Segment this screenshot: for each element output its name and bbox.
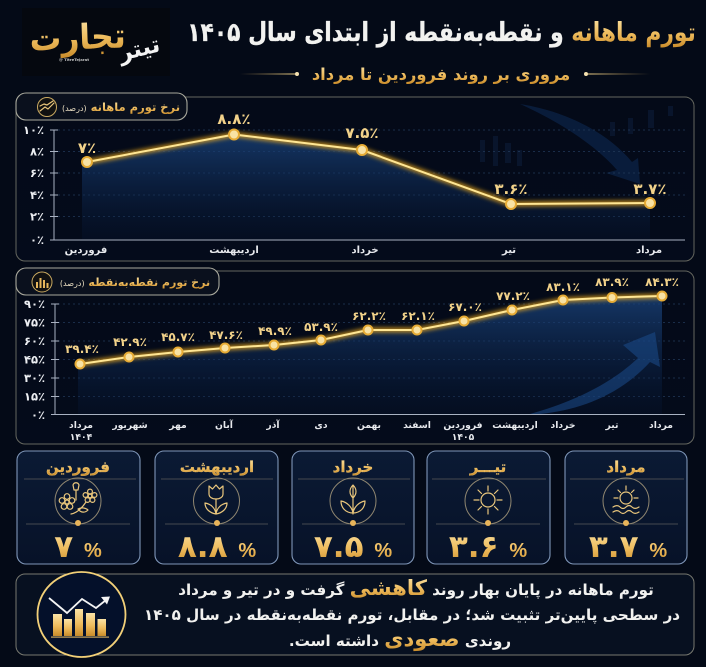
data labels: ۷٪ [78,139,96,157]
y axis: ۶۰٪ [24,334,45,348]
subtitle [240,65,650,84]
y axis [24,297,685,422]
label: point-to-point rate [16,268,219,295]
card: Farvardin [17,451,140,565]
card: Ordibehesht [155,451,278,565]
line series [82,130,655,209]
x labels: اردیبهشت [492,420,538,431]
icon: rising chart badge [38,572,126,657]
label: point-to-point rate: نرخ تورم نقطه‌به‌نقطه (درصد) [60,276,210,289]
x labels: تیر [605,420,618,431]
x labels: مرداد [649,420,673,431]
x labels: ۱۴۰۴ [70,432,93,443]
x labels: ۱۴۰۵ [452,432,475,443]
card: Tir [427,451,550,565]
x labels: اردیبهشت [209,245,259,256]
x labels: فروردین [443,420,483,431]
x labels: اسفند [403,420,431,431]
data labels: ۷.۵٪ [345,124,379,142]
data labels [65,275,679,356]
y axis: ۶٪ [30,166,44,180]
background arrow up [530,332,660,414]
x labels: خرداد [351,245,379,256]
card: Tir: تیـــر [469,458,506,476]
card: Mordad: ۳.۷ % [589,529,667,565]
x labels: تیر [501,245,516,256]
logo: @ TitreTejarat [59,57,89,62]
label: monthly rate [16,93,187,120]
y axis: ۴۵٪ [24,352,45,366]
x labels: مهر [168,420,187,431]
card: Mordad: مرداد [606,458,646,476]
y axis [23,123,685,247]
card: Farvardin: فروردین [46,458,110,476]
data labels: ۸۴.۳٪ [645,275,679,289]
card: Tir: ۳.۶ % [449,529,527,565]
callout text [144,576,680,651]
x labels: فروردین [65,245,107,256]
card: Farvardin: ۷ % [54,529,102,565]
data labels: ۳۹.۴٪ [65,342,99,356]
line series [76,292,666,368]
data labels: ۸۳.۹٪ [595,275,629,289]
callout panel [16,574,694,655]
panel: point-to-point inflation chart [16,271,694,444]
y axis: ۱۰٪ [23,123,44,137]
y axis: ۰٪ [30,233,44,247]
icon: flowers [59,483,97,514]
data labels: ۴۵.۷٪ [161,330,195,344]
y axis: ۱۵٪ [24,390,45,404]
card: Mordad [565,451,687,565]
card: Khordad [292,451,414,565]
y axis: ۳۰٪ [24,371,45,385]
x labels: آبان [215,419,234,431]
logo: تیتر [115,32,163,67]
x labels [69,419,673,443]
icon: sun [474,486,502,514]
card: Ordibehesht: اردیبهشت [180,458,254,476]
data labels: ۷۷.۲٪ [496,289,530,303]
data labels: ۶۲.۱٪ [401,309,435,323]
x labels: آذر [265,419,280,431]
background arrow down [520,104,640,184]
x labels: دی [314,420,328,431]
callout text: تورم ماهانه در پایان بهار روند کاهشی گرفت و در تیر و مرداد [178,576,654,600]
data labels: ۵۳.۹٪ [304,320,338,334]
data labels: ۸۳.۱٪ [546,280,580,294]
x labels: خرداد [551,420,575,431]
icon: sun over waves [613,486,639,514]
x labels: مرداد [69,420,93,431]
background candles [480,106,673,166]
data labels: ۴۷.۶٪ [209,328,243,342]
logo: تجارت [29,15,126,59]
data labels: ۶۷.۰٪ [448,300,482,314]
card: Ordibehesht: ۸.۸ % [178,529,256,565]
title: تورم ماهانه و نقطه‌به‌نقطه از ابتدای سال ۱۴۰۵ [187,17,696,47]
area fill [78,296,662,414]
data labels: ۳.۶٪ [494,180,528,198]
area fill [82,134,650,239]
data labels: ۶۲.۲٪ [352,309,386,323]
y axis: ۸٪ [30,144,44,158]
y axis: ۴٪ [30,188,44,202]
callout text: روندی صعودی داشته است. [289,627,511,651]
y axis: ۷۵٪ [24,316,45,330]
x labels: بهمن [357,420,381,431]
panel: monthly inflation chart [16,97,694,261]
data labels: ۴۲.۹٪ [113,335,147,349]
data labels [78,110,667,198]
icon: sprout [341,485,365,514]
icon: tulip [205,485,227,514]
y axis: ۲٪ [30,210,44,224]
x labels [65,245,662,256]
x labels: مرداد [636,245,662,256]
label: monthly rate: نرخ تورم ماهانه (درصد) [62,100,180,115]
data labels: ۴۹.۹٪ [258,324,292,338]
x labels: شهریور [111,420,148,431]
data labels: ۳.۷٪ [633,180,667,198]
logo [22,8,170,76]
card: Khordad: خرداد [333,458,373,476]
y axis: ۰٪ [31,408,45,422]
y axis: ۹۰٪ [24,297,45,311]
subtitle: مروری بر روند فروردین تا مرداد [312,65,570,84]
data labels: ۸.۸٪ [217,110,251,128]
callout text: در سطحی پایین‌تر تثبیت شد؛ در مقابل، تورم نقطه‌به‌نقطه در سال ۱۴۰۵ [144,606,680,625]
card: Khordad: ۷.۵ % [314,529,392,565]
